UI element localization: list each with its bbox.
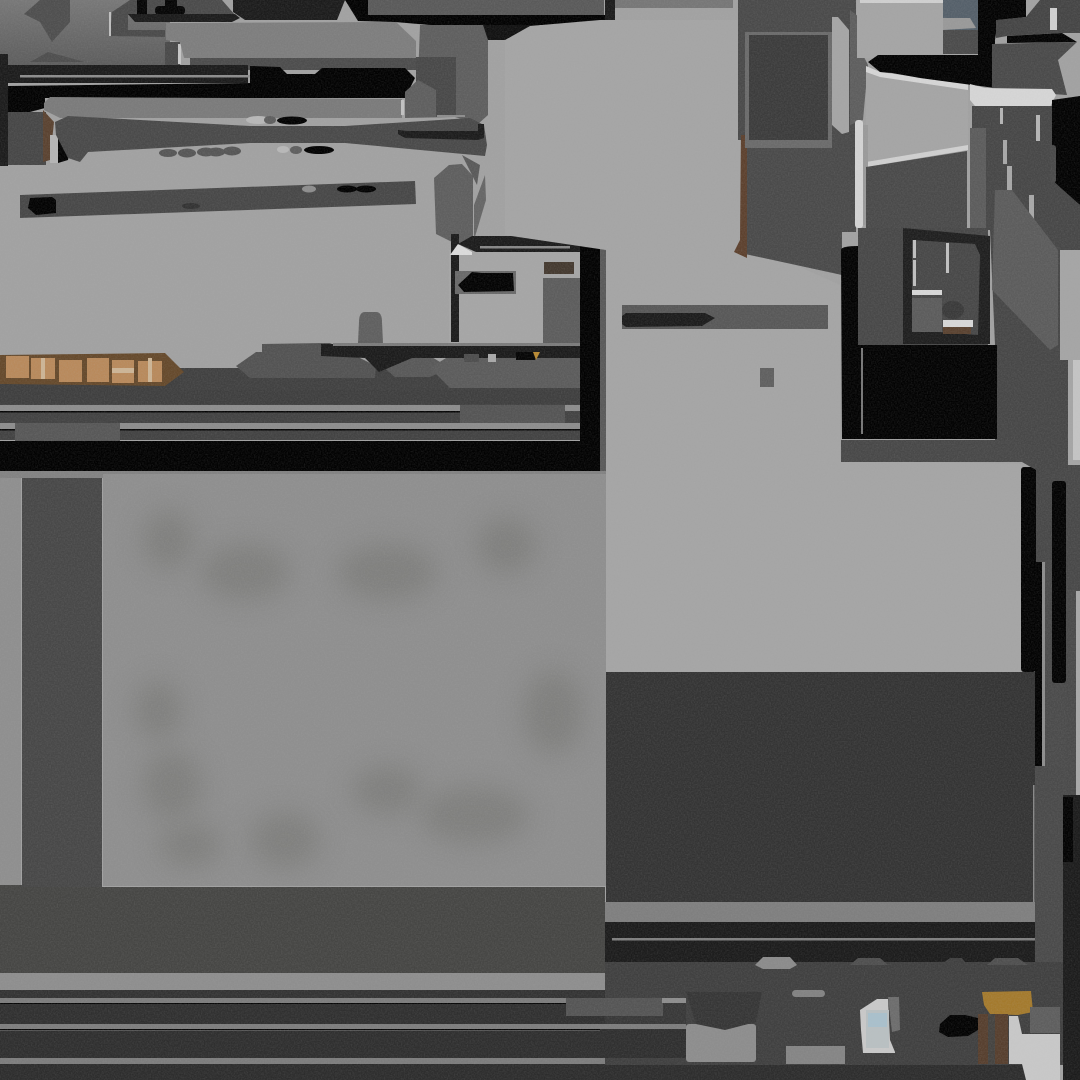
panel: dark vertical road [22,478,102,890]
icon: white wall piece [1009,1007,1060,1080]
panel: sloped concrete wall with white trim [855,66,968,228]
panel: top dark trims [233,0,733,40]
panel: curved dark band [55,116,487,162]
panel: wooden crates strip [0,353,184,386]
panel: top left trim cluster [0,0,240,66]
panel: brown vertical trim [734,135,747,258]
panel: central light concrete wall [505,20,1022,672]
panel: lower storey trim strip [0,343,580,406]
panel: top right brick walls [738,0,856,275]
icon: black hole [939,1015,978,1037]
panel: black right wedge [1052,96,1080,205]
panel: tall black right border of upper left [580,238,600,470]
panel: black T connector [868,0,1077,88]
panel: stripes under crates [0,404,580,441]
panel: mottled concrete floor [103,474,606,886]
panel: dark inset rectangle [745,32,832,148]
panel: bottom row props [600,990,845,1064]
panel: dark floor band [0,885,605,975]
panel: upper light grey slab [166,22,416,58]
panel: right edge concrete [1060,250,1080,465]
panel: dark brick top right [992,0,1080,95]
panel: lower black trim with rail [605,922,1062,962]
icon: white door [860,997,900,1053]
panel: bottom left stripes [0,973,1030,1080]
panel: bottom right brick field [605,962,1063,1065]
panel: black horizontal bar [0,441,600,471]
panel: far right vertical strips [1021,420,1080,1080]
panel: top right concrete wall [857,0,978,58]
panel: second light grey slab [44,97,404,118]
icon: trim notches row [755,957,1028,969]
panel: window frame [903,228,990,344]
panel: light strip beneath dark square [605,902,1054,922]
panel: large dark square [606,672,1035,902]
panel: long sloped dark strip [20,181,416,218]
icon: orange sign and brown post [978,991,1033,1064]
panel: small window block [449,234,605,345]
panel: white cornice [970,84,1056,107]
panel: upper dark strip with rail [0,54,420,166]
panel: brick block with brown trim [8,110,70,165]
panel: central dark wall [858,228,988,346]
panel: dark wall below slope [866,151,967,232]
panel: dark base under black square [841,440,1023,462]
panel: grey vertical strip [850,10,868,125]
panel: left edge strip [0,478,21,885]
icon: black holes row on band [159,116,334,158]
panel: thin inset rail on band [398,124,484,140]
panel: large black square [841,246,997,439]
panel: faceted grey block [434,155,486,245]
panel: grey column block [405,25,488,124]
panel: striped bar [622,305,828,329]
icon: small speckled square [760,368,774,387]
panel: grey diagonal column [970,128,1058,350]
icon: small arched block [358,312,383,343]
panel: textured brick column right [972,106,1080,470]
panel: side concrete strip [832,17,849,134]
